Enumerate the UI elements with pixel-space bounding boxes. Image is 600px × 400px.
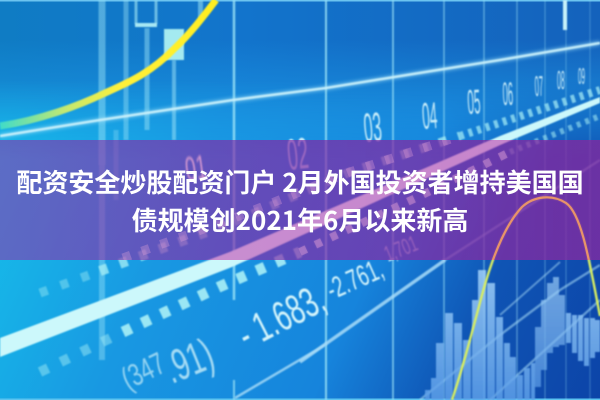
yellow trend line (0, 0, 216, 126)
details glowing through the band (122, 140, 590, 260)
day number labels: 03 (362, 104, 384, 151)
light horizontal trend line (0, 43, 600, 136)
rotated market figures: .91) (157, 328, 221, 393)
main white diagonal band (0, 97, 600, 357)
day number labels: 04 (421, 95, 439, 137)
day number labels (285, 62, 585, 180)
day number labels: 08 (557, 67, 565, 96)
rotated market figures (116, 230, 421, 396)
bar histogram (425, 270, 600, 400)
day number labels: 07 (534, 71, 544, 103)
rotated market figures: (347 (116, 346, 171, 396)
title: 债规模创2021年6月以来新高 (132, 201, 468, 238)
rotated market figures: 1,701 (380, 230, 421, 266)
day number labels: 05 (466, 84, 481, 122)
dotted perspective rows (40, 90, 600, 372)
candlesticks (135, 0, 567, 60)
day number labels: 06 (502, 76, 514, 113)
purple title band (0, 140, 600, 260)
title (16, 163, 584, 238)
yellow-green bell curve (452, 197, 600, 400)
thin diagonal lines (235, 160, 600, 400)
rotated market figures: - 1.683, (230, 276, 333, 358)
rotated market figures: -2.761, (322, 253, 389, 307)
details glowing through the band: 01 (183, 147, 209, 188)
title: 配资安全炒股配资门户 2月外国投资者增持美国国 (16, 163, 584, 200)
day number labels: 09 (578, 62, 585, 89)
day number labels: 02 (285, 129, 311, 180)
